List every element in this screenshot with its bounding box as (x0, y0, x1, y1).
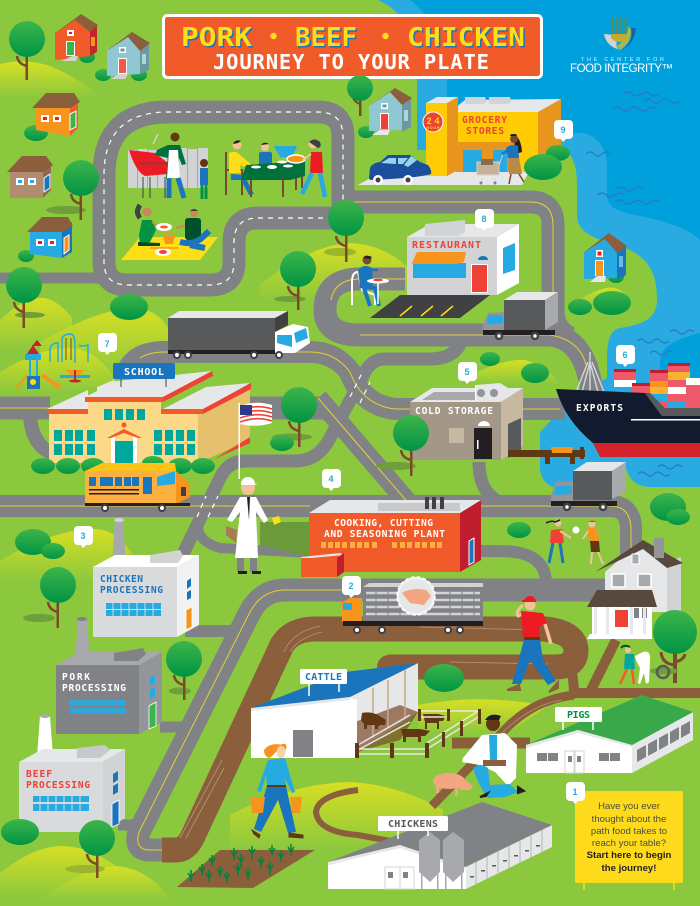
logo: The Center for Food Integrity (570, 17, 673, 75)
logo: The Center for Food Integrity: FOOD INTEGRITY™ (570, 63, 673, 75)
chickens sign: CHICKENS (388, 819, 438, 830)
pigs sign (555, 707, 602, 730)
logo: The Center for Food Integrity: THE CENTER FOR (581, 57, 664, 63)
bubble 6: 6 (622, 350, 628, 360)
dock (508, 447, 585, 464)
badge: 24 hour (423, 112, 443, 132)
bubble 8 (475, 209, 494, 231)
water (378, 0, 700, 490)
bubble 3: 3 (80, 531, 86, 541)
school sign: SCHOOL (124, 367, 164, 378)
barn: cattle (251, 663, 481, 758)
building: school (47, 363, 251, 463)
car (369, 155, 431, 185)
barn: chickens (328, 802, 552, 889)
foreground tree and bush at beef plant (1, 819, 115, 878)
title banner: BEEF (296, 24, 358, 54)
building: grocery stores: GROCERY (462, 115, 507, 126)
bushes (15, 51, 690, 692)
building: beef processing: BEEF (26, 769, 52, 780)
house: tan (7, 156, 53, 198)
farmer on phone (507, 596, 558, 692)
person with shopping cart (477, 134, 524, 184)
cows (361, 712, 446, 742)
roads (0, 112, 631, 850)
tire swing, girl and dog (620, 646, 678, 684)
livestock truck (342, 577, 483, 633)
scene: picnic (121, 205, 218, 260)
building: beef processing: PROCESSING (26, 780, 90, 791)
parking lot (370, 295, 490, 318)
playground (16, 334, 90, 389)
scene: family dinner (226, 140, 325, 197)
delivery truck by restaurant (483, 292, 558, 339)
yellow callout sign: Have you ever (598, 801, 661, 812)
building: pork processing (56, 617, 162, 734)
trees (6, 21, 373, 700)
school bus (85, 463, 190, 511)
pig (433, 773, 473, 796)
farmhouse (587, 538, 683, 639)
badge: 24 hour: 24 (426, 116, 440, 126)
title banner: CHICKEN (407, 23, 525, 53)
cattle sign: CATTLE (305, 672, 342, 683)
building: grocery stores (358, 97, 561, 185)
building: pork processing: PORK (62, 672, 90, 683)
crop field (177, 844, 315, 888)
title banner: PORK (181, 23, 252, 53)
building: chicken processing: PROCESSING (100, 585, 163, 596)
cattle sign (300, 669, 347, 696)
loading box (301, 553, 344, 577)
barn: pigs (526, 695, 693, 773)
building: restaurant (407, 220, 519, 295)
tree by cold storage (376, 415, 429, 476)
school sign (113, 363, 175, 387)
bubble 1: 1 (572, 787, 578, 797)
yellow callout sign: thought about the (592, 814, 666, 825)
title banner: BEEF (295, 23, 357, 53)
ship (556, 352, 700, 457)
house: orange (32, 93, 80, 136)
house: shore blue (583, 233, 627, 282)
person dining at table (352, 256, 389, 306)
bubble 6 (616, 345, 635, 367)
house: centre blue grey (368, 88, 412, 135)
bubble 2: 2 (348, 581, 354, 591)
grocery bushes (524, 145, 570, 180)
bubble 9: 9 (560, 125, 566, 135)
road centre lines (0, 202, 631, 850)
dirt roads (162, 626, 700, 850)
American flag (238, 403, 272, 479)
yellow callout sign: path food takes to (591, 826, 667, 837)
building: beef processing (19, 714, 125, 832)
house: blue (27, 217, 73, 258)
yellow callout sign: reach your table? (592, 838, 666, 849)
title banner (164, 16, 542, 78)
building: cooking, cutting and seasoning plant (301, 497, 481, 577)
house: blue grey (105, 32, 150, 79)
volleyball players (546, 520, 603, 564)
building: cooking, cutting and seasoning plant: COOKING, CUTTING (334, 518, 433, 529)
bubble 9 (554, 120, 573, 142)
silos (419, 832, 464, 889)
bubble 2 (342, 576, 361, 598)
bubble 4: 4 (328, 474, 334, 484)
title banner: JOURNEY TO YOUR PLATE (213, 50, 489, 74)
bubble 8: 8 (482, 214, 487, 224)
big truck (168, 311, 310, 358)
school bushes (31, 456, 215, 474)
bubble 7 (98, 333, 117, 355)
building: cooking, cutting and seasoning plant: AND SEASONING PLANT (324, 529, 445, 540)
bubble 7: 7 (104, 339, 110, 349)
title banner: PORK (182, 24, 254, 54)
bubble 4 (322, 469, 341, 491)
delivery truck by water (551, 462, 626, 510)
building: cold storage (410, 383, 523, 460)
bubble 5: 5 (464, 367, 470, 377)
building: cold storage: COLD STORAGE (415, 406, 493, 417)
bubble 3 (74, 526, 93, 548)
chickens sign (378, 816, 448, 839)
yellow callout sign (566, 782, 683, 890)
scene: backyard grilling (128, 132, 208, 199)
yellow callout sign: the journey! (602, 863, 656, 874)
pigs sign: PIGS (567, 710, 590, 721)
tree by farmhouse (653, 610, 697, 683)
number bubbles (74, 120, 635, 598)
inspector in white coat (226, 477, 310, 574)
fences (357, 710, 480, 754)
building: restaurant: RESTAURANT (412, 240, 481, 251)
badge: 24 hour: HOUR (426, 126, 440, 130)
ship: EXPORTS (576, 403, 623, 414)
house: red (54, 14, 98, 61)
yellow callout sign: Start here to begin (587, 850, 672, 861)
building: chicken processing (93, 518, 199, 637)
title banner: CHICKEN (408, 24, 526, 54)
building: grocery stores: STORES (466, 126, 504, 137)
farmer with buckets (250, 744, 303, 838)
bubble 5 (458, 362, 477, 384)
veterinarian and pig (433, 715, 524, 798)
building: chicken processing: CHICKEN (100, 574, 143, 585)
building: pork processing: PROCESSING (62, 683, 126, 694)
